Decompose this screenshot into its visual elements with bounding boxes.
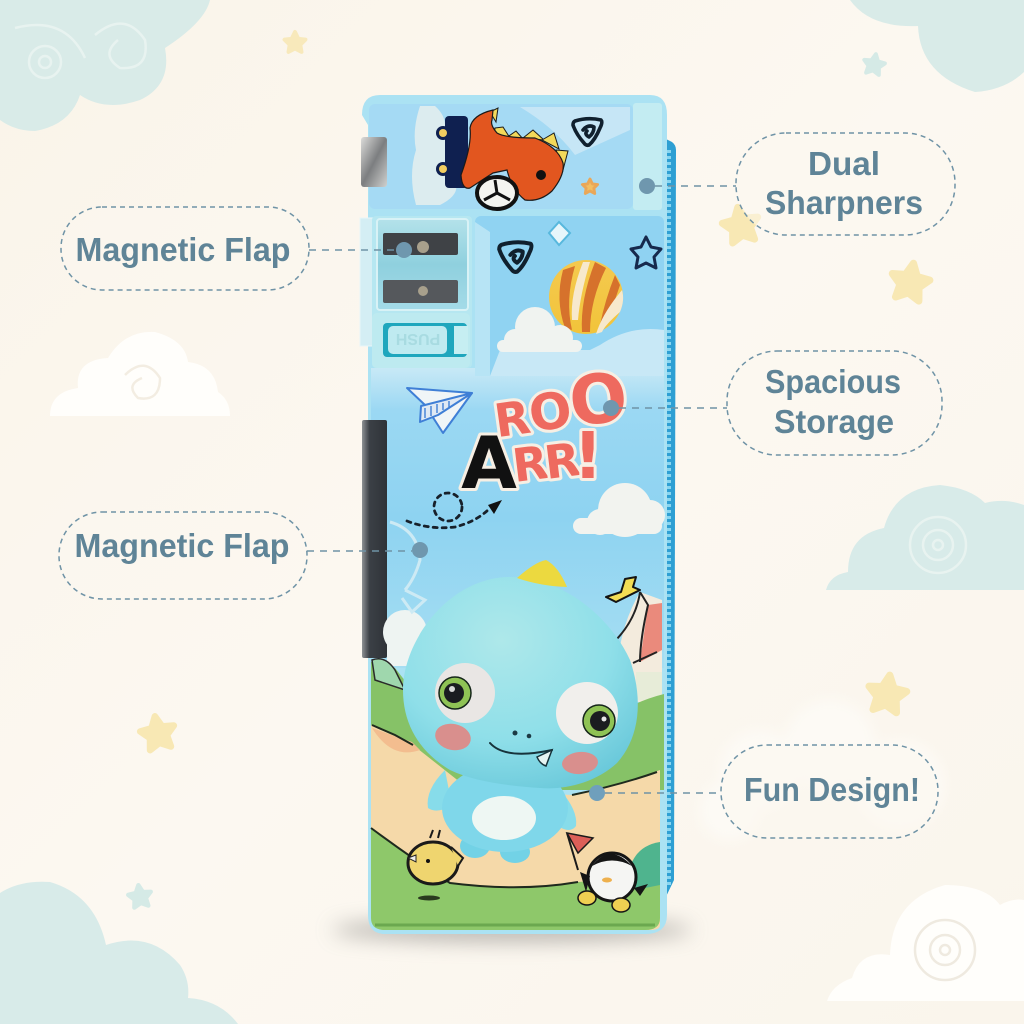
orange dinosaur sticker	[436, 108, 568, 209]
sticker lettering: ROOARR!: !	[573, 420, 603, 494]
dotted flight path	[407, 493, 502, 528]
callout: Magnetic Flap top	[61, 207, 412, 290]
star outline	[631, 237, 661, 268]
sky cloud lower left	[383, 610, 436, 668]
stars	[127, 32, 932, 908]
sticker lettering: ROOARR!	[461, 358, 631, 505]
callout: Dual Sharpners: Sharpners	[765, 184, 923, 221]
penguin	[578, 853, 648, 912]
arms	[428, 770, 576, 830]
callout: Fun Design: Fun Design!	[744, 771, 920, 808]
sticker lettering: ROOARR!: R	[541, 432, 583, 490]
callout: Dual Sharpners	[639, 133, 955, 235]
belly	[472, 796, 536, 840]
case shadow	[332, 918, 692, 942]
paper plane	[407, 388, 472, 433]
callout: Spacious Storage	[603, 351, 942, 455]
lightning bolt	[606, 577, 640, 602]
callout: Magnetic Flap top: Magnetic Flap	[76, 231, 290, 268]
diamond	[549, 222, 570, 245]
callout: Fun Design	[589, 745, 938, 838]
top panel	[369, 103, 662, 210]
sky panel	[371, 368, 664, 668]
faint bubble on sky	[390, 522, 425, 612]
push button: PUSH	[396, 330, 440, 347]
metal clip	[361, 137, 387, 187]
left eye	[435, 663, 495, 723]
sharpener blade top	[383, 233, 458, 255]
right eye	[556, 682, 618, 744]
cloud: bottom right	[827, 885, 1024, 1001]
sticker lettering: ROOARR!: O	[565, 358, 631, 443]
logo panel	[499, 242, 531, 272]
sticker lettering: ROOARR!: R	[509, 435, 551, 493]
cloud: top right	[850, 0, 1024, 92]
star orange top	[582, 179, 598, 193]
callout: Dual Sharpners: Dual	[808, 145, 880, 182]
upper right panel	[475, 216, 664, 376]
tent	[614, 592, 662, 702]
head	[403, 577, 638, 788]
clouds on sky	[490, 329, 664, 376]
logo top	[573, 119, 602, 145]
blue dino toy	[403, 560, 638, 863]
cloud white small	[497, 307, 582, 352]
body	[442, 764, 568, 852]
pale panel bevel	[475, 222, 490, 376]
cloud: top left	[0, 0, 210, 131]
zipper	[662, 138, 676, 905]
faint cloud behind fun design	[700, 700, 945, 840]
right sky cloud	[573, 483, 665, 537]
sticker lettering: ROOARR!: R	[491, 390, 534, 448]
nose and mouth	[490, 730, 552, 766]
chick	[408, 830, 463, 900]
sharpener blade bottom	[383, 280, 458, 303]
cheeks	[433, 721, 599, 776]
callout: Spacious Storage: Spacious	[765, 363, 901, 400]
sticker lettering: ROOARR!: O	[525, 380, 575, 444]
callout: Spacious Storage: Storage	[774, 403, 894, 440]
metal bar	[362, 420, 387, 658]
yellow horn	[517, 560, 567, 587]
callout: Magnetic Flap bottom: Magnetic Flap	[74, 527, 290, 564]
planet	[549, 260, 623, 334]
cloud: right teal	[826, 485, 1024, 590]
cloud: left white	[50, 332, 230, 416]
cloud: bottom left	[0, 882, 238, 1024]
sharpener window	[360, 216, 472, 368]
feet	[460, 834, 530, 863]
push button	[372, 313, 470, 368]
flag	[567, 833, 593, 870]
ground	[371, 659, 664, 930]
sticker lettering: ROOARR!: A	[461, 421, 517, 505]
callout: Magnetic Flap bottom	[59, 512, 428, 599]
case body	[362, 95, 667, 934]
pencil case	[360, 95, 676, 934]
